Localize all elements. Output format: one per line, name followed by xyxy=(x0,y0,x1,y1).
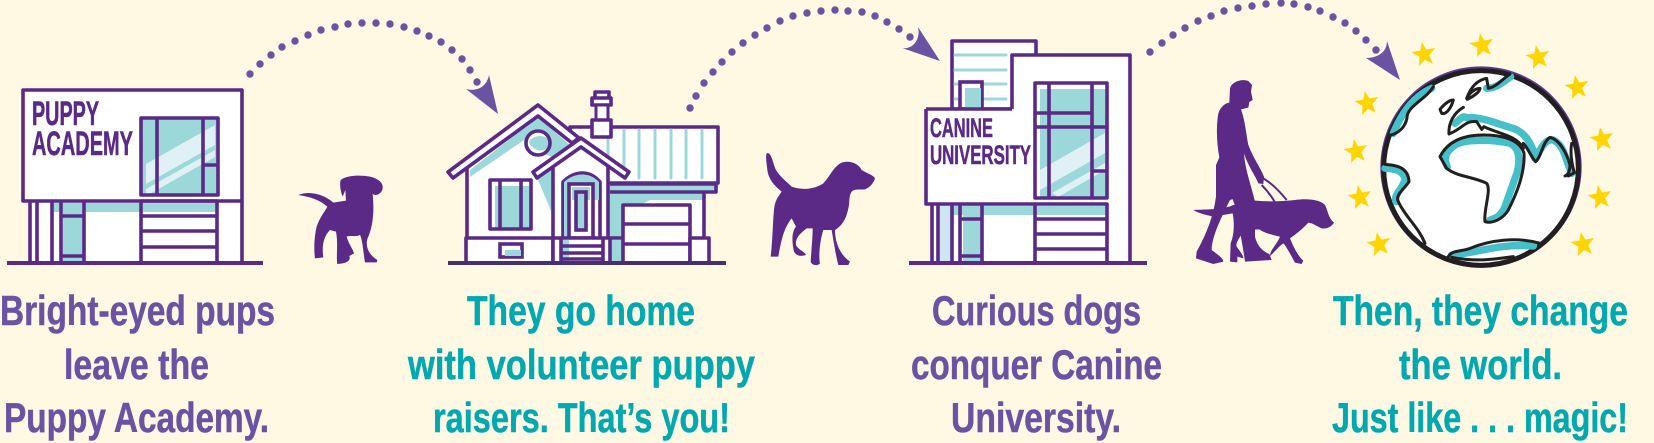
caption: step 3: conquer Canine xyxy=(911,341,1162,388)
garage wing xyxy=(570,127,718,263)
caption: step 1 xyxy=(0,287,275,441)
caption: step 3: Curious dogs xyxy=(932,287,1141,334)
caption: step 2: with volunteer puppy xyxy=(407,341,756,388)
garage door xyxy=(623,205,709,263)
building: Puppy Academy xyxy=(7,90,263,265)
caption: step 1: Puppy Academy. xyxy=(4,394,269,441)
caption: step 3: University. xyxy=(951,394,1121,441)
caption: step 3 xyxy=(911,287,1162,441)
caption: step 2: They go home xyxy=(467,287,695,334)
caption: step 1: leave the xyxy=(64,341,209,388)
building: Canine University xyxy=(909,41,1147,265)
arrow: dotted arc to university xyxy=(686,6,940,112)
stars around globe xyxy=(1342,31,1616,257)
icon: puppy silhouette xyxy=(298,176,383,264)
arrow: dotted arc to house xyxy=(246,19,498,114)
building: volunteer's house xyxy=(448,92,726,265)
chimney xyxy=(592,92,611,137)
main roof xyxy=(448,105,579,178)
caption: step 4: the world. xyxy=(1399,341,1562,388)
icon: adult dog silhouette xyxy=(766,153,875,265)
round window xyxy=(526,131,550,155)
arrow: dotted arc to globe xyxy=(1146,0,1400,80)
sign: Puppy Academy: PUPPY xyxy=(32,95,99,133)
window: Canine University xyxy=(1035,83,1107,198)
sign: Canine University: CANINE xyxy=(930,113,993,143)
sign: Puppy Academy xyxy=(32,95,133,163)
icon: person walking with guide dog xyxy=(1193,80,1334,264)
caption: step 2 xyxy=(407,287,756,441)
porch xyxy=(533,138,629,238)
continents: teal coast xyxy=(1385,77,1572,255)
sign: Puppy Academy: ACADEMY xyxy=(32,125,133,163)
caption: step 1: Bright-eyed pups xyxy=(0,287,275,334)
front window xyxy=(490,180,531,229)
back tower xyxy=(952,41,1036,109)
sign: Canine University: UNIVERSITY xyxy=(930,140,1031,170)
base and steps xyxy=(466,238,623,263)
continents: black outline xyxy=(1385,74,1574,260)
icon: globe xyxy=(1380,66,1582,268)
caption: step 4 xyxy=(1332,287,1628,441)
caption: step 2: raisers. That’s you! xyxy=(433,394,730,441)
sign: Canine University xyxy=(930,113,1031,170)
window: Puppy Academy xyxy=(141,118,218,196)
